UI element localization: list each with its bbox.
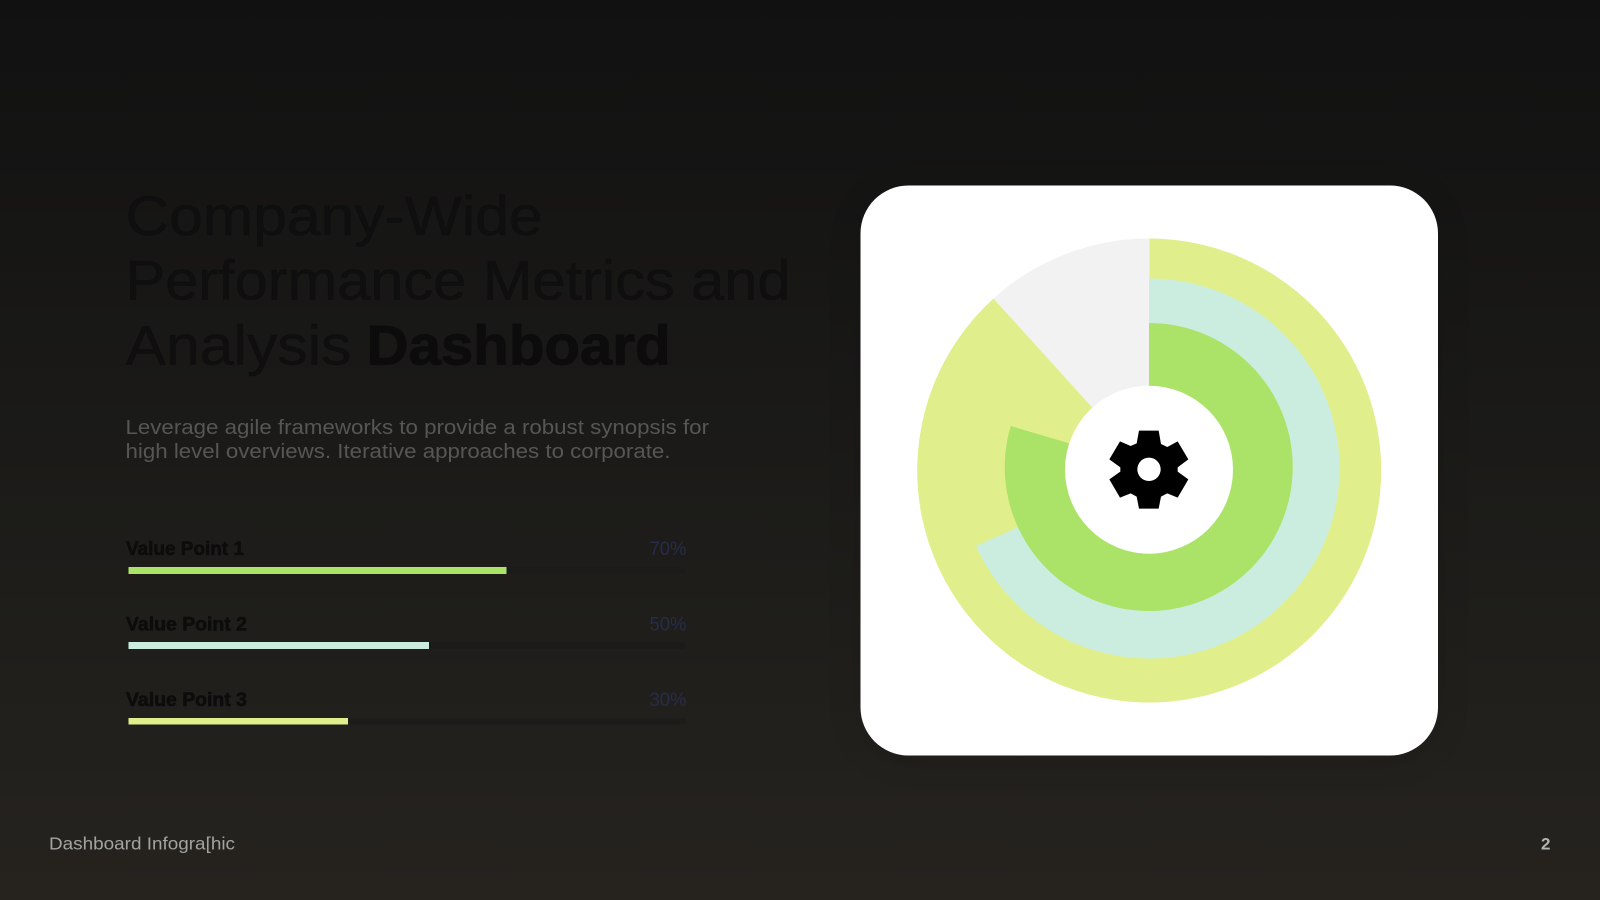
title: Performance Metrics and [126,248,790,312]
value point 3: 30% [650,690,687,711]
progress list [126,539,687,724]
value point 3 [126,690,687,724]
icon: gear [1109,431,1188,509]
description text: high level overviews. Iterative approaches to corporate. [126,441,670,463]
card shadow [860,190,1438,760]
description text: Leverage agile frameworks to provide a robust synopsis for [126,417,709,439]
value point 3: Value Point 3 [126,690,247,711]
radial chart [917,238,1381,702]
middle ring [976,278,1339,658]
title: Company-Wide [126,184,542,247]
value point 2 [126,614,687,649]
value point 1: 70% [650,539,687,560]
title: Analysis [126,314,352,376]
value point 2: 50% [650,614,687,636]
value point 1: Value Point 1 [126,539,244,560]
value point 1 [126,539,687,574]
center hole [1065,386,1233,554]
page number: 2 [1541,834,1550,854]
title: Dashboard [366,314,670,376]
title [126,184,790,376]
footer label: Dashboard Infogra[hic [49,834,235,854]
description text [126,417,709,463]
inner ring [1005,323,1293,611]
outer ring remainder [994,238,1150,470]
panel: chart card [860,186,1438,756]
outer ring value [917,238,1381,702]
value point 2: Value Point 2 [126,614,247,636]
